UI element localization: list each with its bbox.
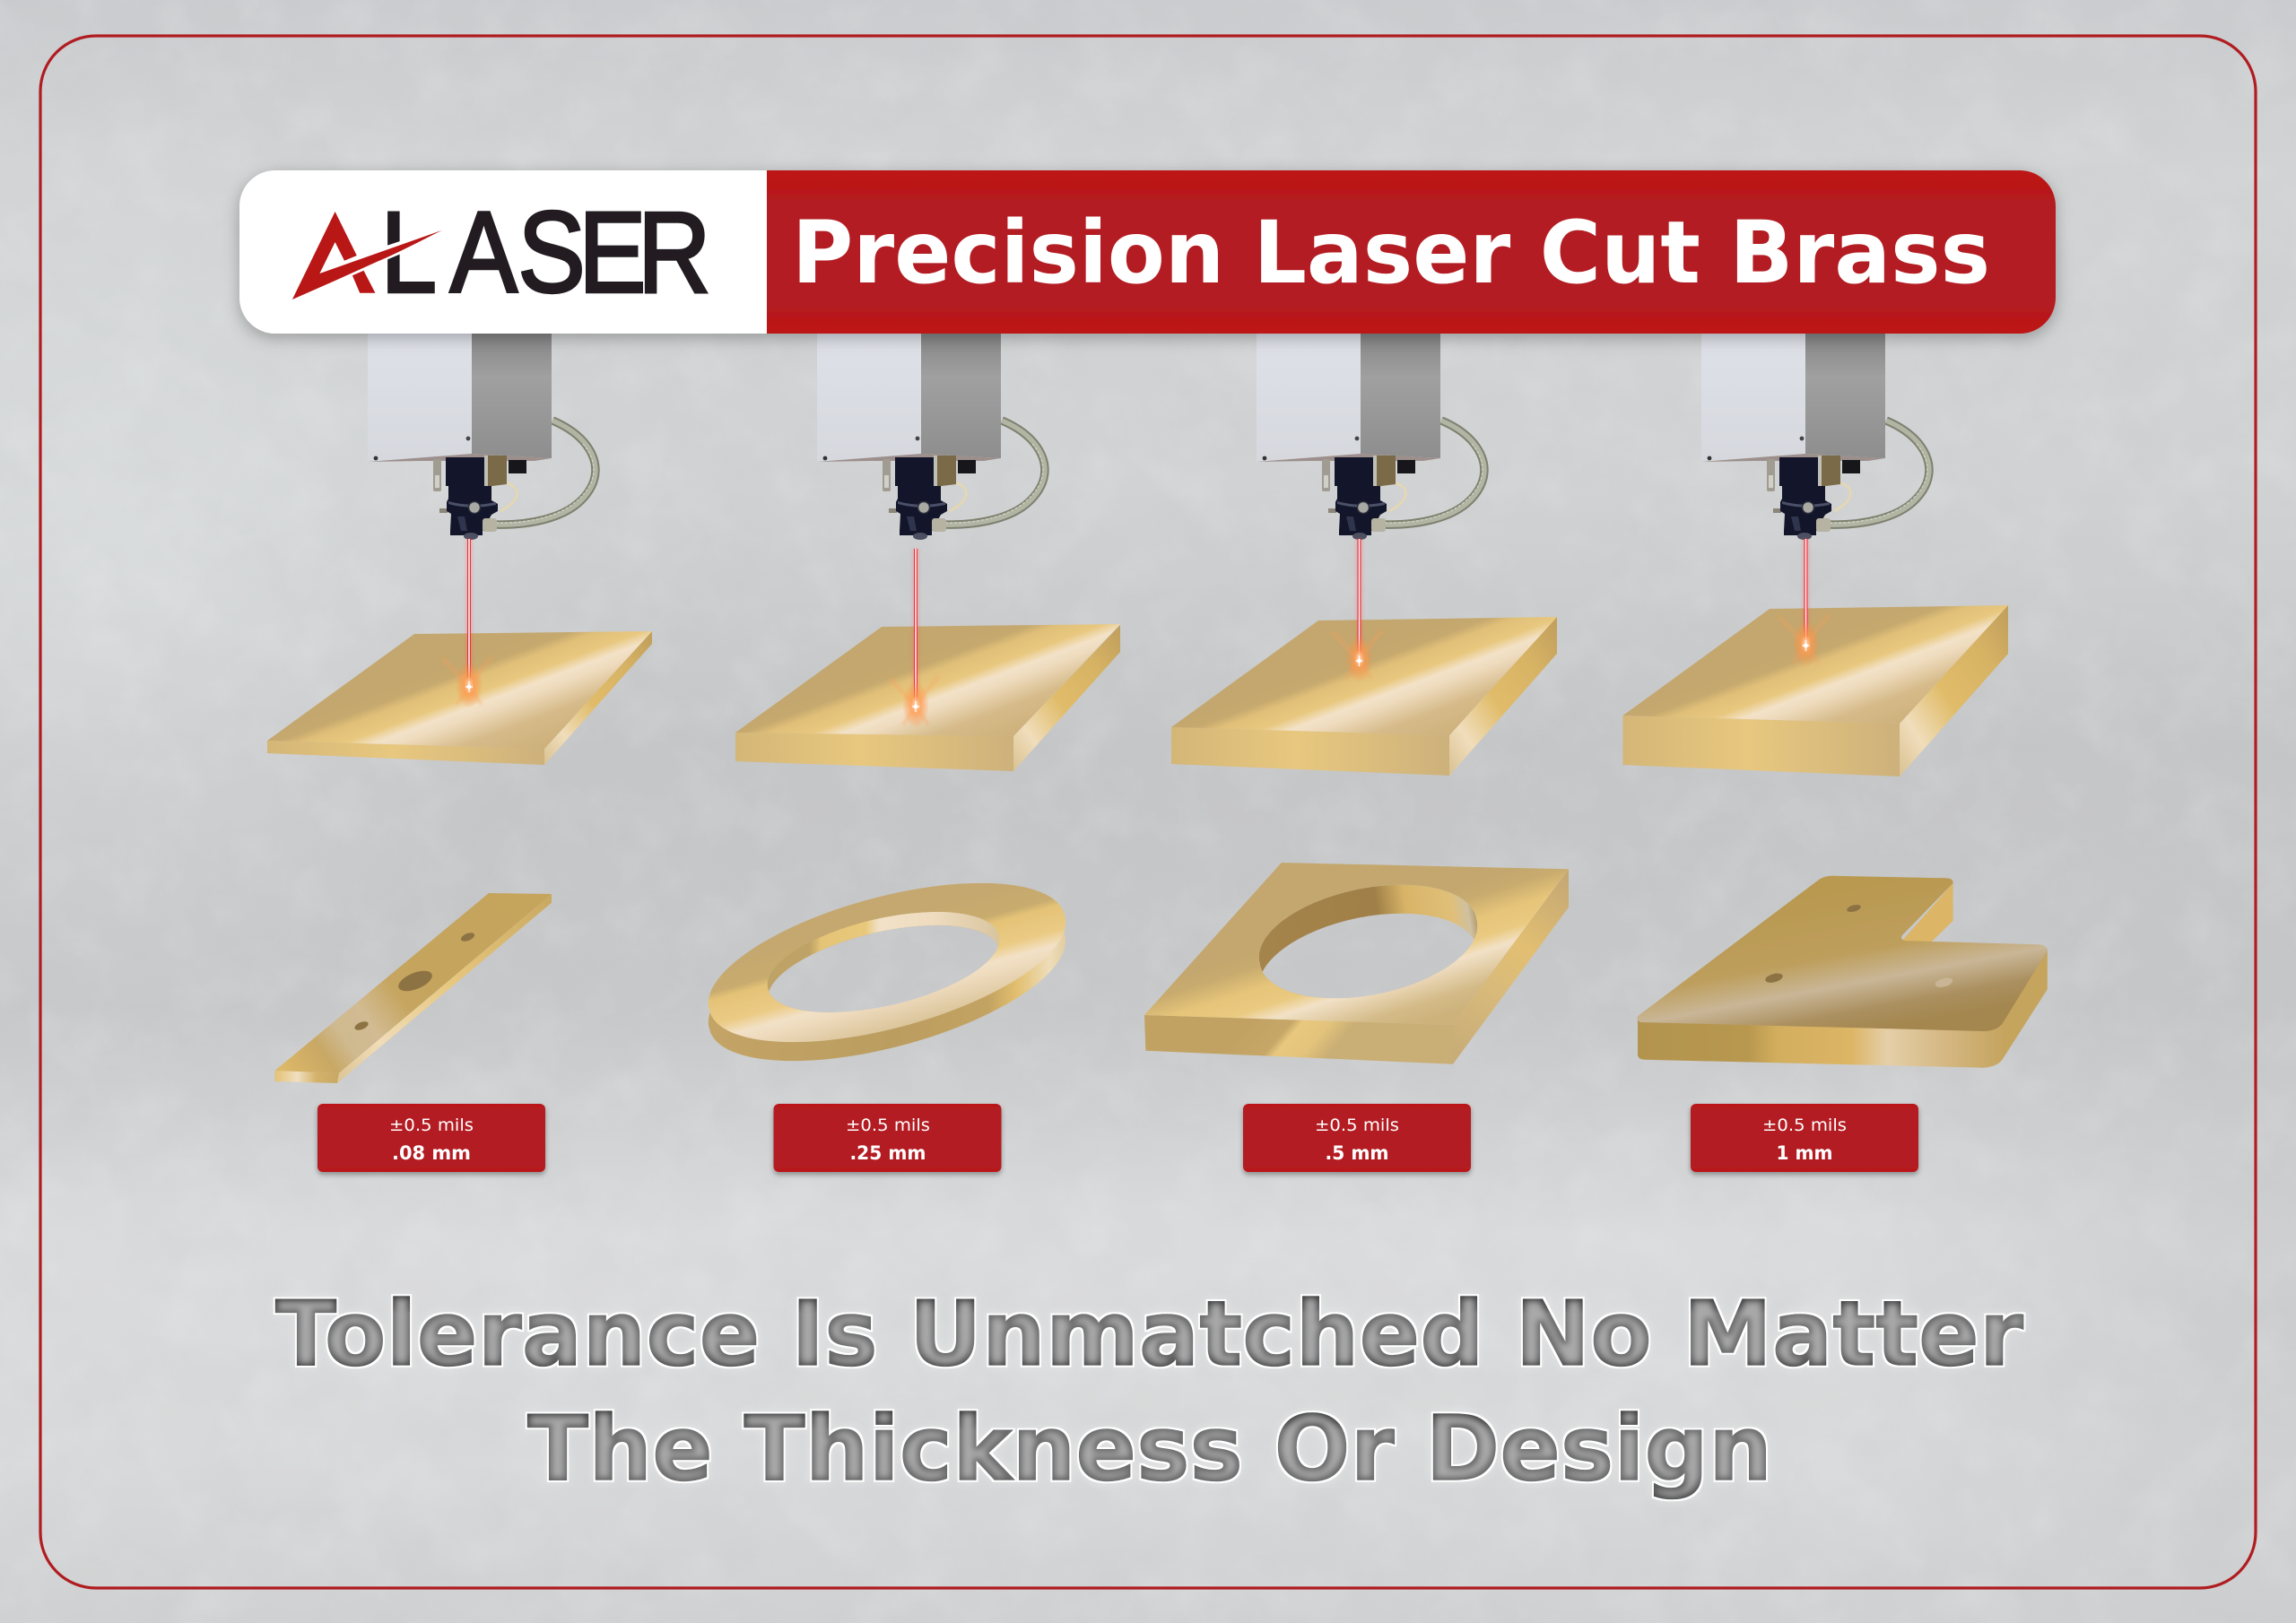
bottom slogan: The Thickness Or Design [527,1396,1772,1501]
column 2: laser head cutting .25 mm plate [735,334,1120,771]
part 3: rectangular plate with round hole [1144,863,1569,1064]
brass plate 2 [735,624,1120,771]
tolerance label .25 mm: .25 mm [850,1142,926,1164]
brass plate 1 [267,631,652,765]
white logo panel [239,170,767,334]
icon: laser head 2 [817,334,1045,540]
part 4: notched plate with holes [1637,876,2048,1068]
laser beam and spark 3 [1333,539,1383,682]
tolerance label .25 mm: ±0.5 mils [846,1115,930,1135]
laser beam and spark 1 [442,539,492,708]
tolerance label .25 mm [773,1104,1001,1172]
tolerance label .5 mm: .5 mm [1326,1142,1388,1164]
column 3: laser head cutting .5 mm plate [1171,334,1557,776]
tolerance label .08 mm: .08 mm [392,1142,471,1164]
tolerance label .08 mm: ±0.5 mils [389,1115,474,1135]
icon: laser head 1 [368,334,596,540]
brass plate 4 [1623,605,2008,777]
laser beam and spark 2 [889,549,939,728]
bottom slogan: Tolerance Is Unmatched No Matter [275,1281,2024,1386]
brass plate 3 [1171,617,1557,776]
laser beam and spark 4 [1779,539,1830,667]
title: Precision Laser Cut Brass [792,203,1990,303]
tolerance label .5 mm: ±0.5 mils [1315,1115,1399,1135]
logo: A LASER: LASER [380,188,711,317]
tolerance label 1 mm: ±0.5 mils [1762,1115,1847,1135]
tolerance label .5 mm [1243,1104,1471,1172]
part 2: brass ring [709,883,1065,1061]
header banner [239,170,2056,334]
red title panel [767,170,2056,334]
bottom slogan [275,1281,2024,1501]
icon: laser head 3 [1257,334,1484,540]
part 1: thin drilled strip [274,893,552,1083]
tolerance label 1 mm [1691,1104,1918,1172]
tolerance label 1 mm: 1 mm [1776,1142,1833,1164]
column 4: laser head cutting 1 mm plate [1623,334,2008,777]
tolerance label .08 mm [317,1104,545,1172]
icon: laser head 4 [1701,334,1929,540]
column 1: laser head cutting .08 mm plate [267,334,652,765]
